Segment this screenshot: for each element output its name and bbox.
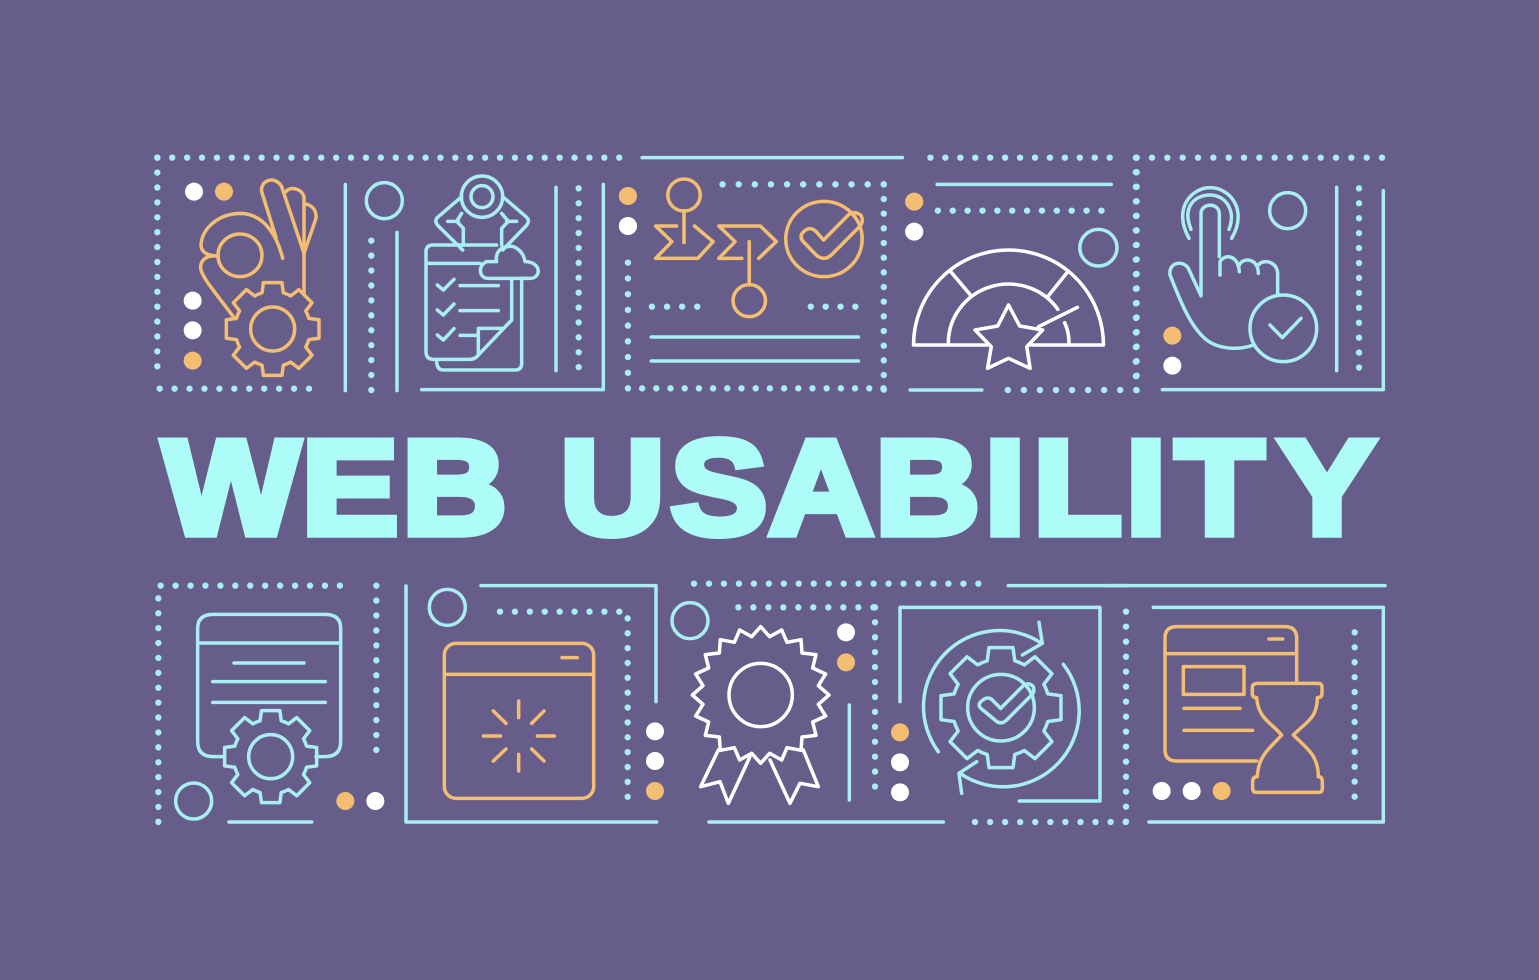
dots: panel accents [837, 623, 909, 801]
title: WEB USABILITY [163, 413, 1375, 563]
dots: panel accents [1163, 327, 1181, 375]
panel: workflow and rating gauge [619, 158, 1137, 390]
icon: document with gear [198, 614, 341, 803]
icon: ok hand with gear [201, 180, 319, 375]
panel: page loading time [1110, 586, 1385, 822]
icon: browser window with hourglass [1165, 627, 1322, 792]
icon: robot arm clipboard with cloud [426, 176, 538, 370]
icon: finger tap with check [1170, 188, 1317, 362]
dots: panel accents [336, 722, 664, 810]
icon: award rosette [692, 627, 829, 803]
dots: panel accents [1153, 782, 1231, 800]
panel: award badge and process gear [672, 584, 1127, 822]
dots: panel accents [619, 187, 923, 241]
icon: workflow steps with check [656, 179, 862, 317]
dots: hand panel accents [184, 183, 233, 370]
panel: ok hand and clipboard [157, 158, 625, 391]
panel: settings document and loading window [158, 586, 664, 822]
panel: tap gesture [1137, 158, 1384, 390]
icon: gear with check and cycle arrows [924, 622, 1079, 793]
icon: browser window loading spinner [444, 643, 594, 798]
icon: star rating gauge [914, 250, 1103, 368]
